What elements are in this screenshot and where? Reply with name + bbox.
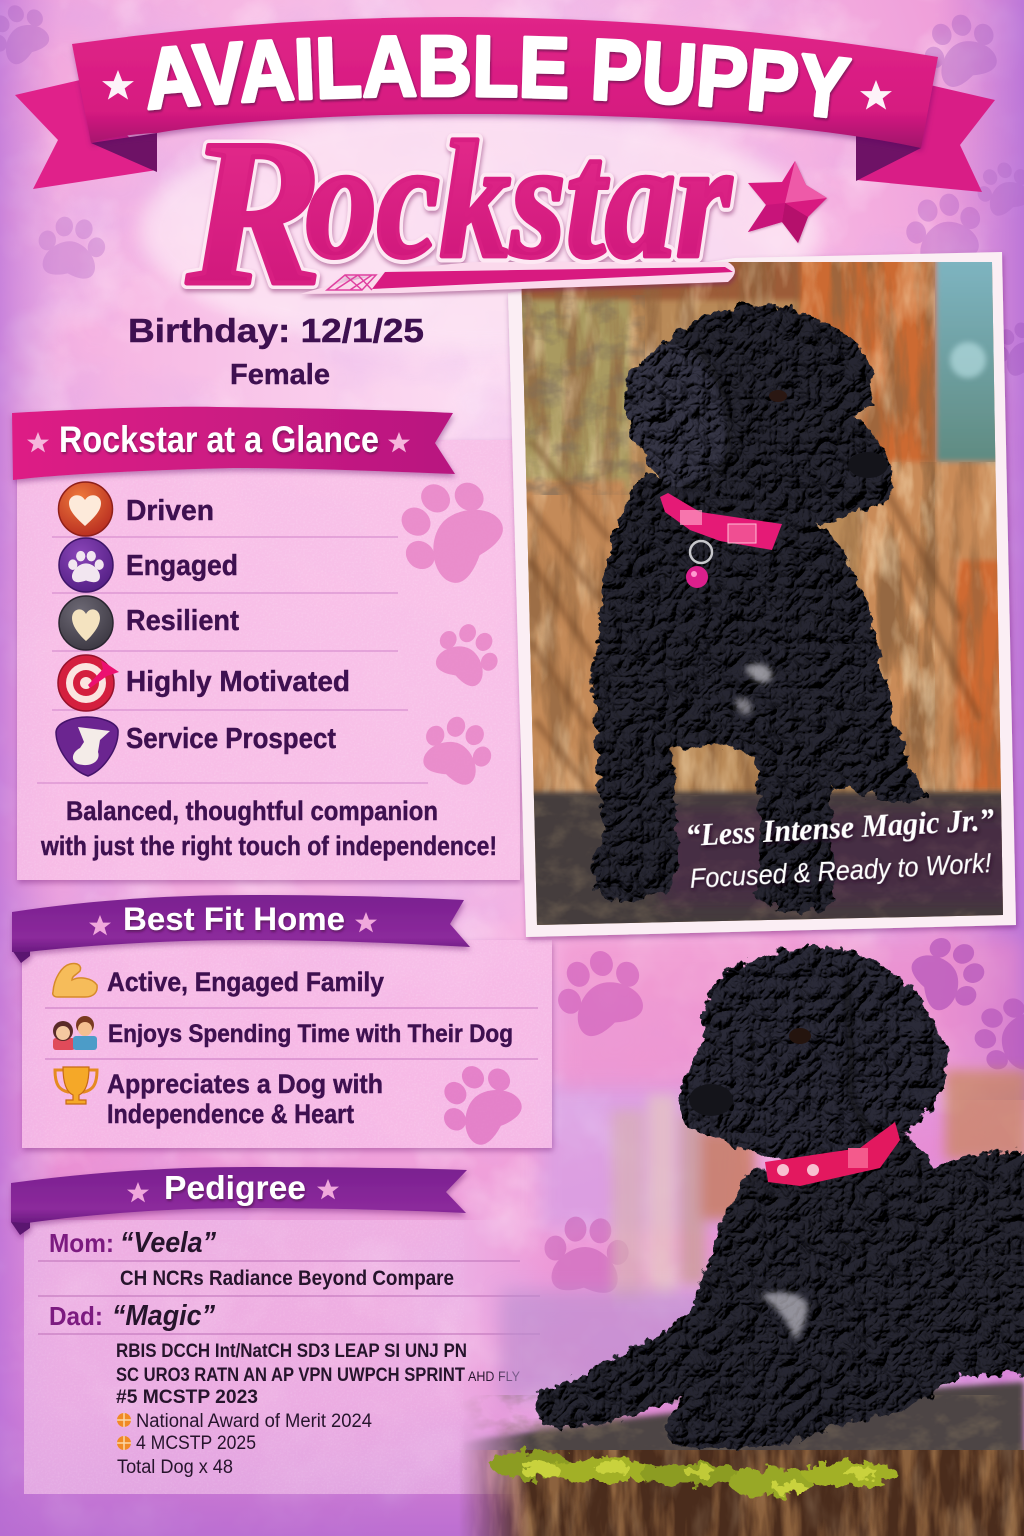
collar bbox=[660, 493, 782, 550]
photo caption: Focused & Ready to Work! bbox=[689, 847, 992, 894]
photo caption bbox=[685, 801, 997, 894]
soft wood backdrop bbox=[612, 1070, 1024, 1300]
dad titles: AHD FLY bbox=[468, 1368, 521, 1384]
title text bbox=[147, 96, 850, 119]
dad titles bbox=[116, 1341, 521, 1478]
icon: couple bbox=[53, 1016, 97, 1050]
birthday: Birthday: 12/1/25 bbox=[128, 312, 424, 349]
text: heading: Pedigree bbox=[164, 1169, 306, 1206]
icon: faceted star bbox=[748, 161, 827, 243]
stars bbox=[102, 70, 892, 110]
dad titles: SC URO3 RATN AN AP VPN UWPCH SPRINT bbox=[116, 1365, 465, 1386]
photo: standing puppy bbox=[505, 250, 1020, 937]
dad titles: #5 MCSTP 2023 bbox=[116, 1387, 258, 1408]
heading ribbon: Rockstar at a Glance bbox=[12, 407, 455, 480]
sex: Female bbox=[230, 359, 330, 391]
dad label: Dad: bbox=[49, 1301, 103, 1331]
ribbon body bbox=[72, 17, 938, 148]
text: Driven: Driven bbox=[126, 495, 214, 527]
collar bbox=[765, 1122, 900, 1186]
top ribbon banner: AVAILABLE PUPPY bbox=[147, 34, 854, 122]
panel: Rockstar at a Glance bbox=[17, 440, 520, 880]
text: appreciates bbox=[107, 1069, 383, 1129]
list rows bbox=[37, 482, 428, 783]
icon: resilient heart bbox=[59, 596, 113, 650]
mom label: Mom: bbox=[49, 1228, 114, 1258]
icon: service shield bbox=[56, 717, 118, 776]
puppy name: Rockstar bbox=[186, 97, 735, 329]
puppy name: Rockstar: R bbox=[186, 97, 322, 329]
puppy 1 bbox=[592, 303, 925, 909]
text: heading: Rockstar at a Glance bbox=[59, 419, 379, 460]
icon: heart bbox=[58, 482, 112, 536]
icon: trophy bbox=[55, 1067, 97, 1104]
dad titles: RBIS DCCH Int/NatCH SD3 LEAP SI UNJ PN bbox=[116, 1341, 467, 1362]
swoosh bbox=[300, 262, 735, 294]
right tail bbox=[857, 85, 995, 192]
tree stump bbox=[460, 1382, 1024, 1536]
mom label bbox=[49, 1227, 216, 1259]
heading ribbon: Pedigree bbox=[11, 1167, 467, 1235]
text: Engaged: Engaged bbox=[126, 550, 238, 582]
dad titles: National Award of Merit 2024 bbox=[136, 1411, 372, 1432]
tagline: with just the right touch of independence! bbox=[40, 831, 497, 861]
mom registered name: CH NCRs Radiance Beyond Compare bbox=[120, 1267, 454, 1290]
photo caption: “Less Intense Magic Jr.” bbox=[685, 801, 995, 853]
icon: flexed arm bbox=[53, 963, 97, 997]
photo: lying puppy on stump bbox=[460, 944, 1024, 1536]
tagline: Balanced, thoughtful companion bbox=[66, 796, 438, 826]
text: appreciates: Independence & Heart bbox=[107, 1099, 354, 1129]
puppy 2 bbox=[532, 944, 1024, 1446]
panel: Best Fit Home bbox=[22, 940, 552, 1155]
puppy name: Rockstar: R bbox=[186, 97, 322, 329]
panel: Pedigree bbox=[24, 1220, 560, 1494]
paw prints in panel bbox=[381, 461, 516, 791]
text: Resilient: Resilient bbox=[126, 605, 239, 637]
top ribbon banner bbox=[15, 16, 995, 192]
text: Service Prospect: Service Prospect bbox=[126, 723, 336, 755]
text: Highly Motivated: Highly Motivated bbox=[126, 666, 350, 698]
dad titles: Total Dog x 48 bbox=[117, 1457, 233, 1478]
paw print bbox=[427, 1050, 533, 1155]
text: appreciates: Appreciates a Dog with bbox=[107, 1069, 383, 1099]
puppy name: Rockstar: ockstar bbox=[306, 107, 732, 293]
mom label: “Veela” bbox=[120, 1227, 216, 1259]
dad label: “Magic” bbox=[112, 1300, 215, 1332]
text: active family: Active, Engaged Family bbox=[107, 967, 384, 997]
moss bbox=[490, 1451, 898, 1497]
puppy name: Rockstar: ockstar bbox=[306, 107, 732, 293]
dad titles: 4 MCSTP 2025 bbox=[136, 1433, 256, 1454]
dad label bbox=[49, 1300, 215, 1332]
text: spending time: Enjoys Spending Time with Their Dog bbox=[108, 1020, 513, 1048]
text: heading: Best Fit Home bbox=[123, 901, 345, 937]
icon: target bbox=[58, 655, 119, 711]
icon: paw bbox=[59, 538, 113, 592]
heading ribbon: Best Fit Home bbox=[12, 895, 470, 963]
left tail bbox=[15, 80, 157, 189]
tagline bbox=[40, 796, 497, 861]
bell bbox=[686, 541, 712, 588]
